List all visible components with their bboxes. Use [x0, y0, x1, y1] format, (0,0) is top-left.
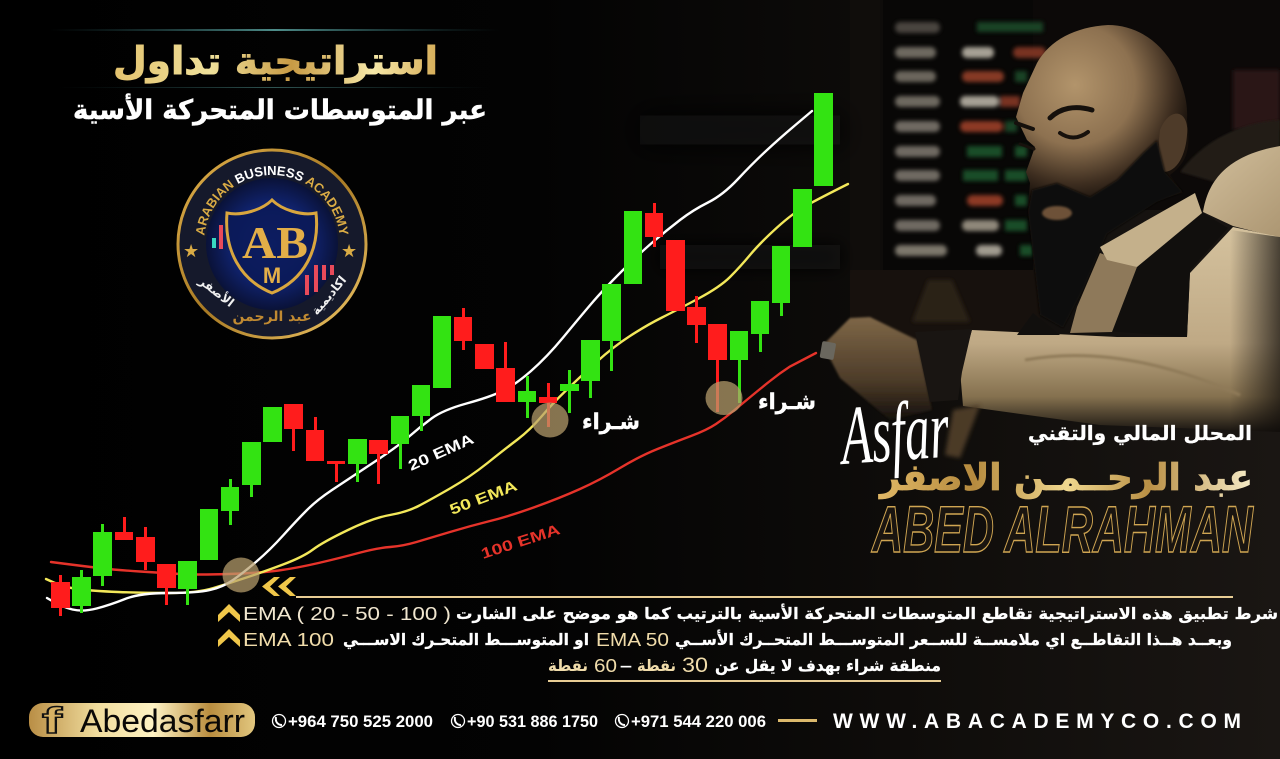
signature: Asfar: [835, 383, 952, 483]
logo star right: ★: [341, 241, 357, 262]
sleeve fold: [1025, 356, 1240, 395]
left chevrons: [262, 577, 296, 596]
vest: [1107, 213, 1228, 337]
label: 50 EMA: 50 EMA: [447, 477, 520, 519]
ear: [1159, 114, 1187, 172]
watch: [820, 341, 836, 360]
forearm shadow: [945, 405, 980, 458]
phone 3: +971 544 220 006: [631, 712, 766, 731]
wristband: [915, 329, 972, 402]
divider: [778, 719, 817, 722]
phone 2: +90 531 886 1750: [467, 712, 598, 731]
hand: [823, 317, 932, 420]
chair: [1180, 120, 1280, 185]
facebook handle: Abedasfarr: [80, 703, 245, 739]
shirt front: [1070, 253, 1137, 333]
academy logo badge: [176, 148, 368, 340]
line 3 arabic: منطقة شراء بهدف لا يقل عن: [715, 656, 941, 675]
title line 1: استراتيجية تداول: [113, 39, 438, 84]
logo arabic name: عبد الرحمن: [232, 309, 312, 325]
line 2 arabic right: وبعــد هــذا التقاطــع اي ملامســة للســعر المتوســـط المتحــرك الأســي: [675, 630, 1232, 650]
strategy text block: [218, 596, 1278, 682]
red candles: [51, 203, 727, 616]
logo AB monogram: AB: [242, 217, 308, 268]
label: 100 EMA: 100 EMA: [479, 521, 562, 563]
facebook pill: [29, 700, 255, 741]
title line 2: عبر المتوسطات المتحركة الأسية: [73, 93, 487, 126]
buy marker 2: [706, 381, 742, 415]
crossover marker: [222, 558, 260, 592]
footer: [29, 700, 1241, 741]
line 2 EMA 100: EMA 100: [243, 630, 334, 650]
ticker board: [640, 0, 1280, 340]
buy label 1: شـراء: [582, 410, 640, 435]
analyst arabic name: عبد الرحــمـن الاصفر: [878, 456, 1253, 499]
brows and eyes: [1016, 108, 1092, 149]
lip: [1042, 206, 1072, 220]
buy marker 1: [532, 402, 568, 438]
logo star left: ★: [183, 241, 199, 262]
title: [73, 39, 487, 126]
logo shield: [227, 200, 317, 293]
buy label 2: شـراء: [758, 390, 816, 415]
decorative top lines: [50, 29, 500, 88]
beard: [1028, 140, 1183, 328]
logo crest: M: [263, 263, 281, 288]
line 2 arabic left: او المتوســـط المتحـرك الاســـي: [343, 630, 589, 650]
line 2 EMA 50: EMA 50: [596, 630, 669, 650]
candlestick chart with EMA lines: [46, 93, 848, 616]
phone 1: +964 750 525 2000: [288, 712, 433, 731]
logo chart candles: [212, 225, 334, 295]
line 3 number 60: 60: [594, 656, 617, 676]
website: WWW.ABACADEMYCO.COM: [833, 710, 1241, 733]
line 3 points: نقطة: [637, 656, 676, 675]
portrait of the analyst: [820, 25, 1280, 458]
line 3 dash: –: [620, 656, 632, 675]
logo arabic left: الأصفر: [195, 272, 237, 310]
sleeve right shading: [1230, 230, 1280, 432]
green candles: [72, 93, 833, 613]
facebook icon: f: [42, 700, 64, 741]
analyst job title: المحلل المالي والتقني: [1028, 421, 1252, 446]
collar: [1100, 193, 1202, 267]
head: [1016, 25, 1188, 327]
line 3 points 2: نقطة: [548, 656, 588, 675]
line 1 latin: EMA ( 20 - 50 - 100 ): [243, 604, 451, 624]
line 1 arabic: شرط تطبيق هذه الاستراتيجية تقاطع المتوسطات المتحركة الأسية بالترتيب كما هو موضح على الشارت: [456, 604, 1278, 623]
EMA 100 line: [51, 353, 816, 574]
logo arc text: ARABIAN BUSINESS ACADEMY: [196, 166, 348, 236]
shirt sleeve: [960, 227, 1280, 432]
label: 20 EMA: 20 EMA: [406, 431, 477, 475]
EMA 20 line: [47, 111, 812, 611]
up chevrons: [218, 604, 240, 647]
EMA 50 line: [46, 184, 848, 593]
line 3 number 30: 30: [682, 654, 708, 677]
logo arabic right: اكاديمية: [309, 273, 349, 318]
